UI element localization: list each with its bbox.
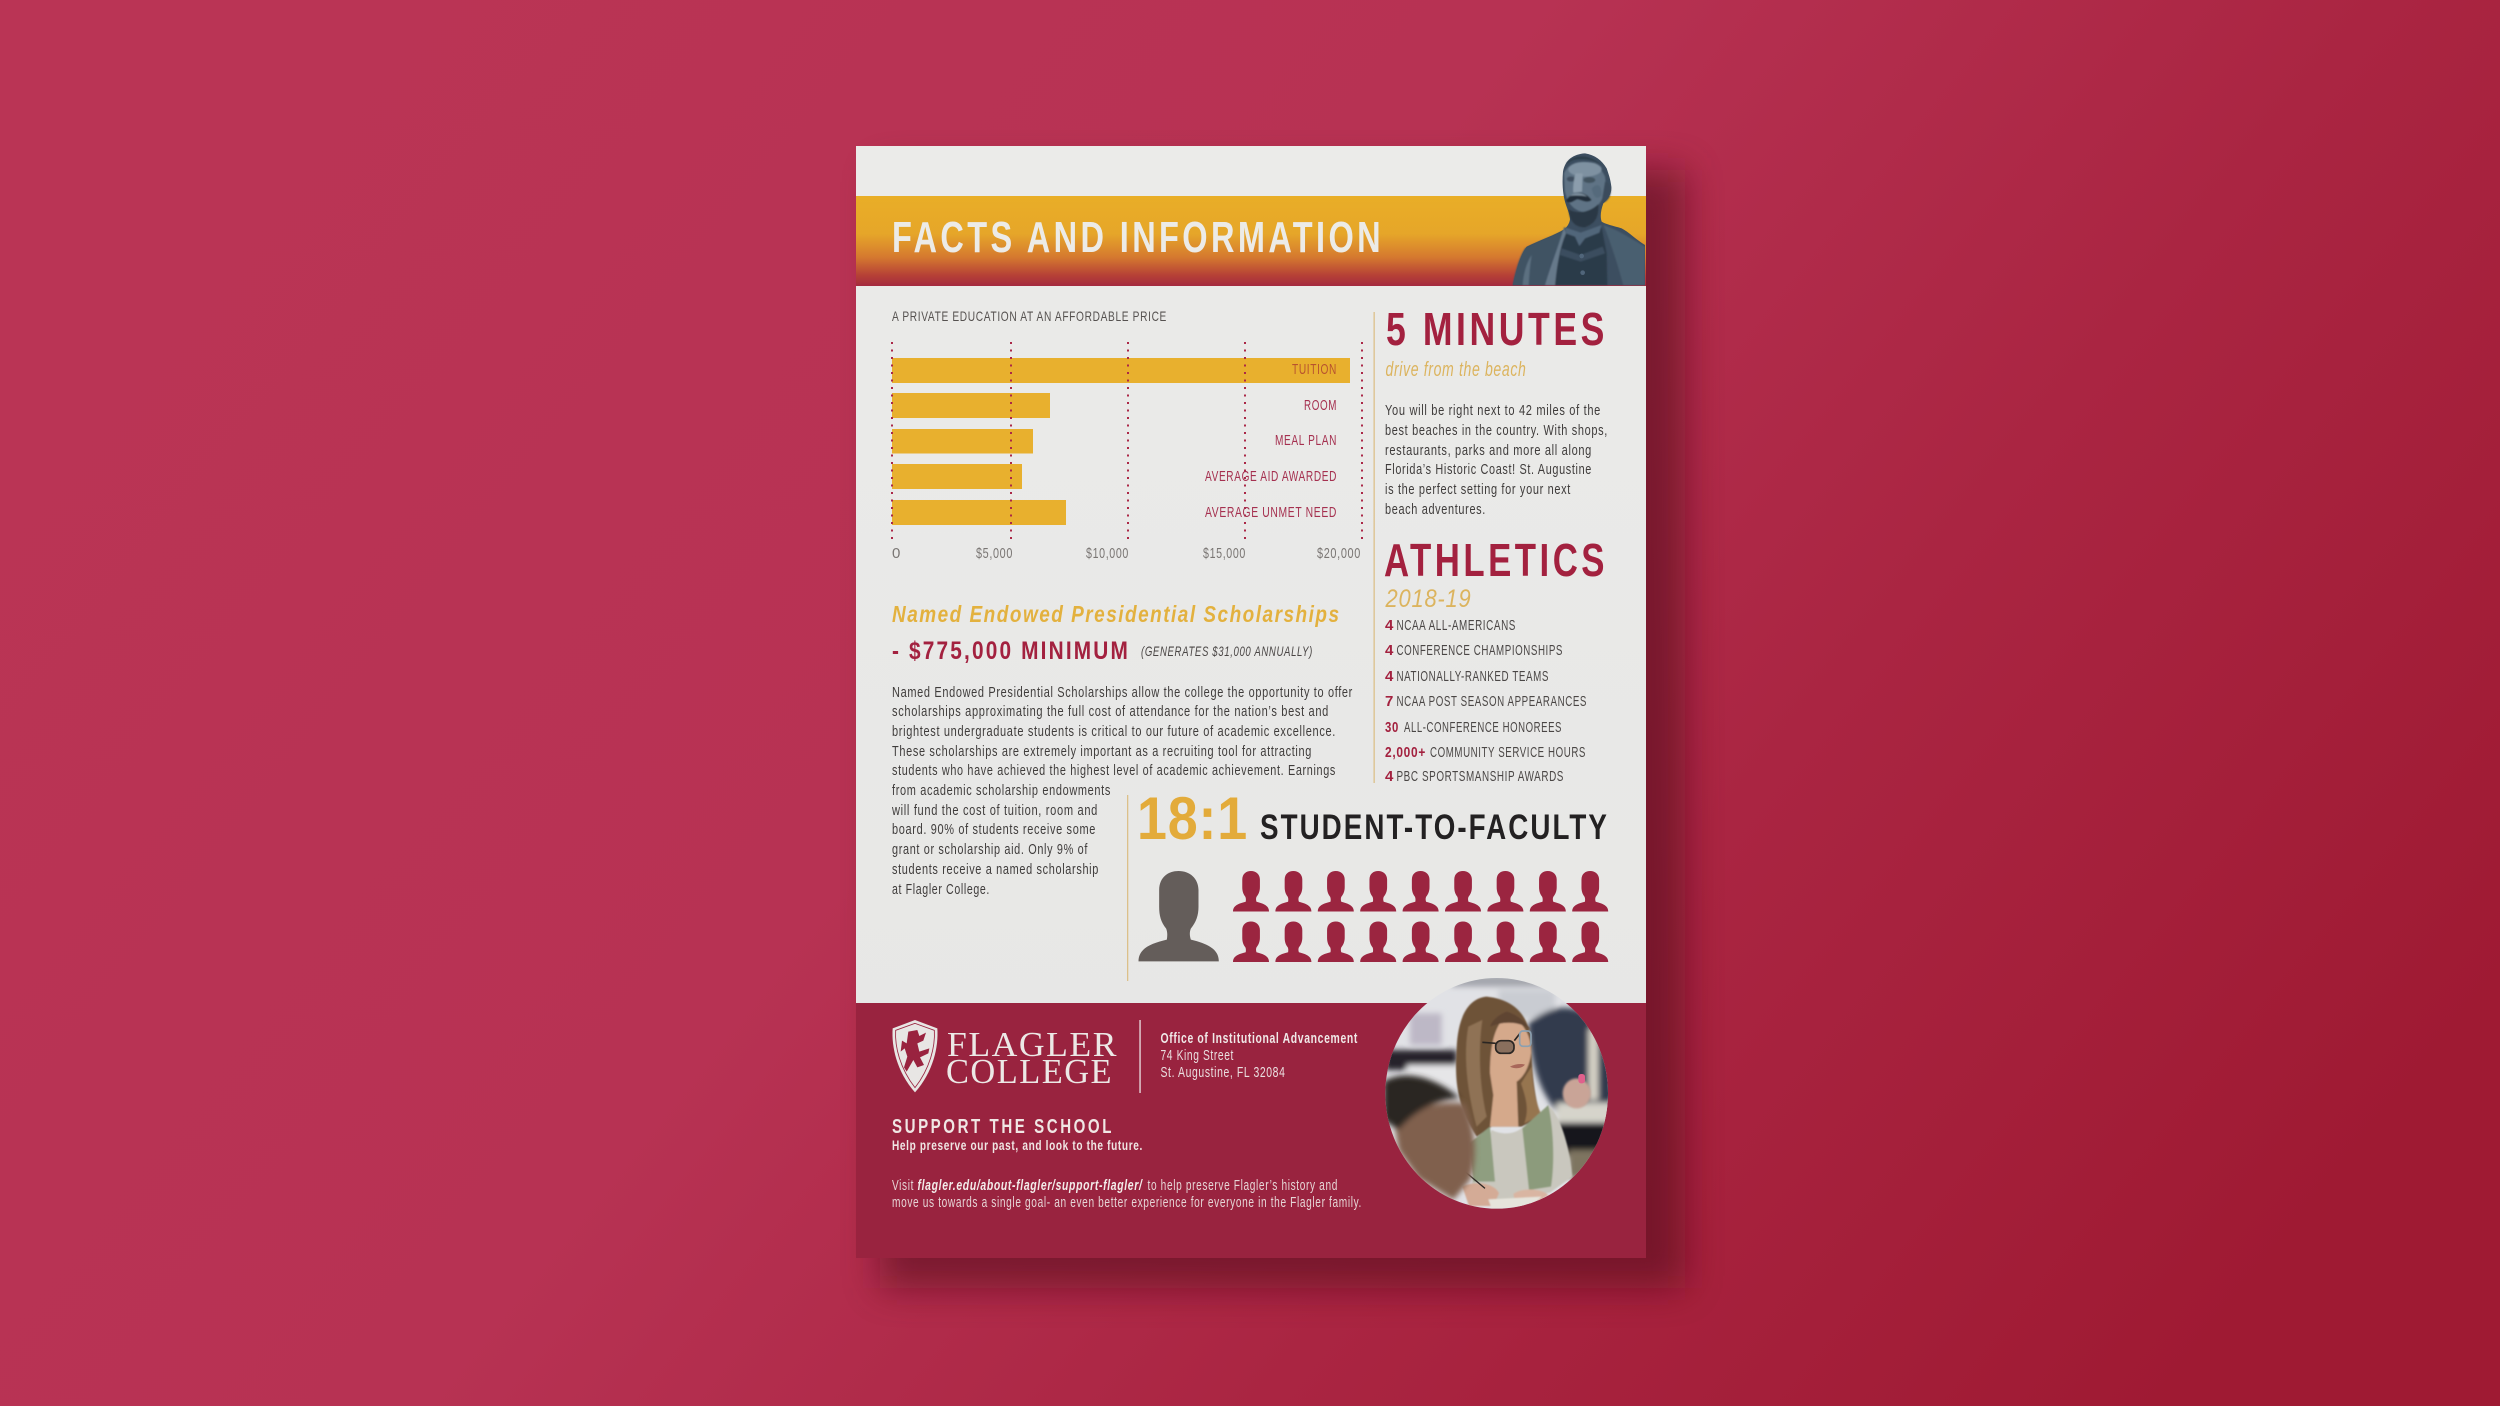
body text: is the perfect setting for your next <box>1385 481 1571 498</box>
subheading: drive from the beach <box>1386 359 1526 381</box>
stats list: 4 <box>1385 642 1394 659</box>
bars <box>892 358 1350 525</box>
panel: student to faculty ratio <box>1137 785 1609 962</box>
body text: from academic scholarship endowments <box>892 782 1111 799</box>
body text: You will be right next to 42 miles of the <box>1385 402 1601 419</box>
header band <box>856 196 1646 286</box>
bar labels: MEAL PLAN <box>1275 433 1337 449</box>
bar labels <box>1205 362 1337 521</box>
office address: 74 King Street <box>1160 1047 1234 1064</box>
axis labels: $5,000 <box>976 545 1013 562</box>
annual note: (GENERATES $31,000 ANNUALLY) <box>1141 643 1313 659</box>
body text: Florida’s Historic Coast! St. Augustine <box>1385 461 1592 478</box>
logo wordmark <box>946 1025 1118 1091</box>
axis labels: $10,000 <box>1086 545 1129 562</box>
axis labels: $15,000 <box>1203 545 1246 562</box>
icon: shield logo <box>892 1020 938 1092</box>
heading: 5 MINUTES <box>1386 303 1608 355</box>
logo divider <box>1139 1020 1141 1093</box>
stats list: COMMUNITY SERVICE HOURS <box>1430 744 1586 761</box>
stats list: 4 <box>1385 617 1394 634</box>
support body: to help preserve Flagler’s history and <box>1148 1178 1338 1194</box>
stats list: CONFERENCE CHAMPIONSHIPS <box>1396 642 1563 659</box>
axis labels <box>892 545 1361 562</box>
grid lines <box>892 342 1362 539</box>
body text: will fund the cost of tuition, room and <box>891 802 1098 819</box>
body text: board. 90% of students receive some <box>892 821 1096 838</box>
panel: brochure sheet <box>856 146 1646 1258</box>
heading: Named Endowed Presidential Scholarships <box>892 601 1340 627</box>
stats list: NATIONALLY-RANKED TEAMS <box>1396 668 1549 685</box>
ratio number: 18:1 <box>1137 785 1248 852</box>
office address: Office of Institutional Advancement <box>1160 1031 1358 1047</box>
stats list: 4 <box>1385 668 1394 685</box>
sheet shadow <box>880 170 1685 1288</box>
bar labels: AVERAGE AID AWARDED <box>1205 469 1337 485</box>
stats list: 30 <box>1385 719 1399 736</box>
photo: student in class <box>1385 978 1608 1209</box>
support body: flagler.edu/about-flagler/support-flagler/ <box>918 1178 1143 1194</box>
stats list: ALL-CONFERENCE HONOREES <box>1404 719 1562 736</box>
icons: students <box>1233 871 1608 962</box>
logo wordmark: FLAGLER <box>947 1025 1118 1064</box>
support body <box>892 1178 1362 1211</box>
chart heading: A PRIVATE EDUCATION AT AN AFFORDABLE PRICE <box>892 308 1167 324</box>
panel: 5 minutes <box>1385 303 1608 518</box>
office address: St. Augustine, FL 32084 <box>1160 1064 1286 1081</box>
ratio label: STUDENT-TO-FACULTY <box>1260 808 1609 847</box>
bar labels: AVERAGE UNMET NEED <box>1205 505 1337 521</box>
stats list <box>1385 617 1587 785</box>
body text <box>1385 402 1608 518</box>
blurred man <box>1383 1075 1475 1200</box>
bar labels: ROOM <box>1304 398 1337 414</box>
right column rule <box>1374 312 1375 783</box>
stats list: NCAA POST SEASON APPEARANCES <box>1396 693 1587 710</box>
panel: tuition chart <box>892 308 1362 562</box>
title: FACTS AND INFORMATION <box>892 213 1384 262</box>
logo wordmark: COLLEGE <box>946 1052 1113 1091</box>
body text: brightest undergraduate students is critical to our future of academic excellence. <box>892 723 1336 740</box>
year: 2018-19 <box>1385 585 1472 613</box>
support tagline: Help preserve our past, and look to the future. <box>892 1137 1143 1153</box>
office address <box>1160 1031 1358 1081</box>
axis labels: 0 <box>892 545 901 562</box>
body text: best beaches in the country. With shops, <box>1385 422 1608 439</box>
stats list: 7 <box>1385 693 1394 710</box>
heading: ATHLETICS <box>1384 534 1608 586</box>
panel: athletics <box>1384 534 1608 785</box>
panel: footer <box>856 1003 1646 1258</box>
stats list: PBC SPORTSMANSHIP AWARDS <box>1396 768 1564 785</box>
body text: at Flagler College. <box>892 881 990 898</box>
icon: faculty member <box>1138 871 1219 961</box>
stats list: 4 <box>1385 768 1394 785</box>
panel: scholarships <box>891 601 1353 898</box>
body text: students receive a named scholarship <box>892 861 1099 878</box>
ratio column rule <box>1127 795 1128 981</box>
support body: move us towards a single goal- an even better experience for everyone in the Flagler family. <box>892 1195 1362 1211</box>
body text: beach adventures. <box>1385 501 1486 518</box>
icon: statue <box>1513 153 1645 285</box>
bar labels: TUITION <box>1292 362 1337 378</box>
axis labels: $20,000 <box>1317 545 1361 562</box>
body text <box>891 684 1353 898</box>
stats list: NCAA ALL-AMERICANS <box>1396 617 1516 634</box>
body text: scholarships approximating the full cost of attendance for the nation’s best and <box>892 703 1329 720</box>
support heading: SUPPORT THE SCHOOL <box>892 1116 1114 1138</box>
support body: Visit <box>892 1178 914 1194</box>
body text: These scholarships are extremely important as a recruiting tool for attracting <box>892 743 1312 760</box>
body text: Named Endowed Presidential Scholarships allow the college the opportunity to offer <box>892 684 1353 701</box>
stats list: 2,000+ <box>1385 744 1426 761</box>
body text: grant or scholarship aid. Only 9% of <box>892 841 1088 858</box>
woman <box>1456 997 1572 1209</box>
body text: students who have achieved the highest level of academic achievement. Earnings <box>892 762 1336 779</box>
body text: restaurants, parks and more all along <box>1385 442 1592 459</box>
minimum amount: - $775,000 MINIMUM <box>892 637 1130 665</box>
